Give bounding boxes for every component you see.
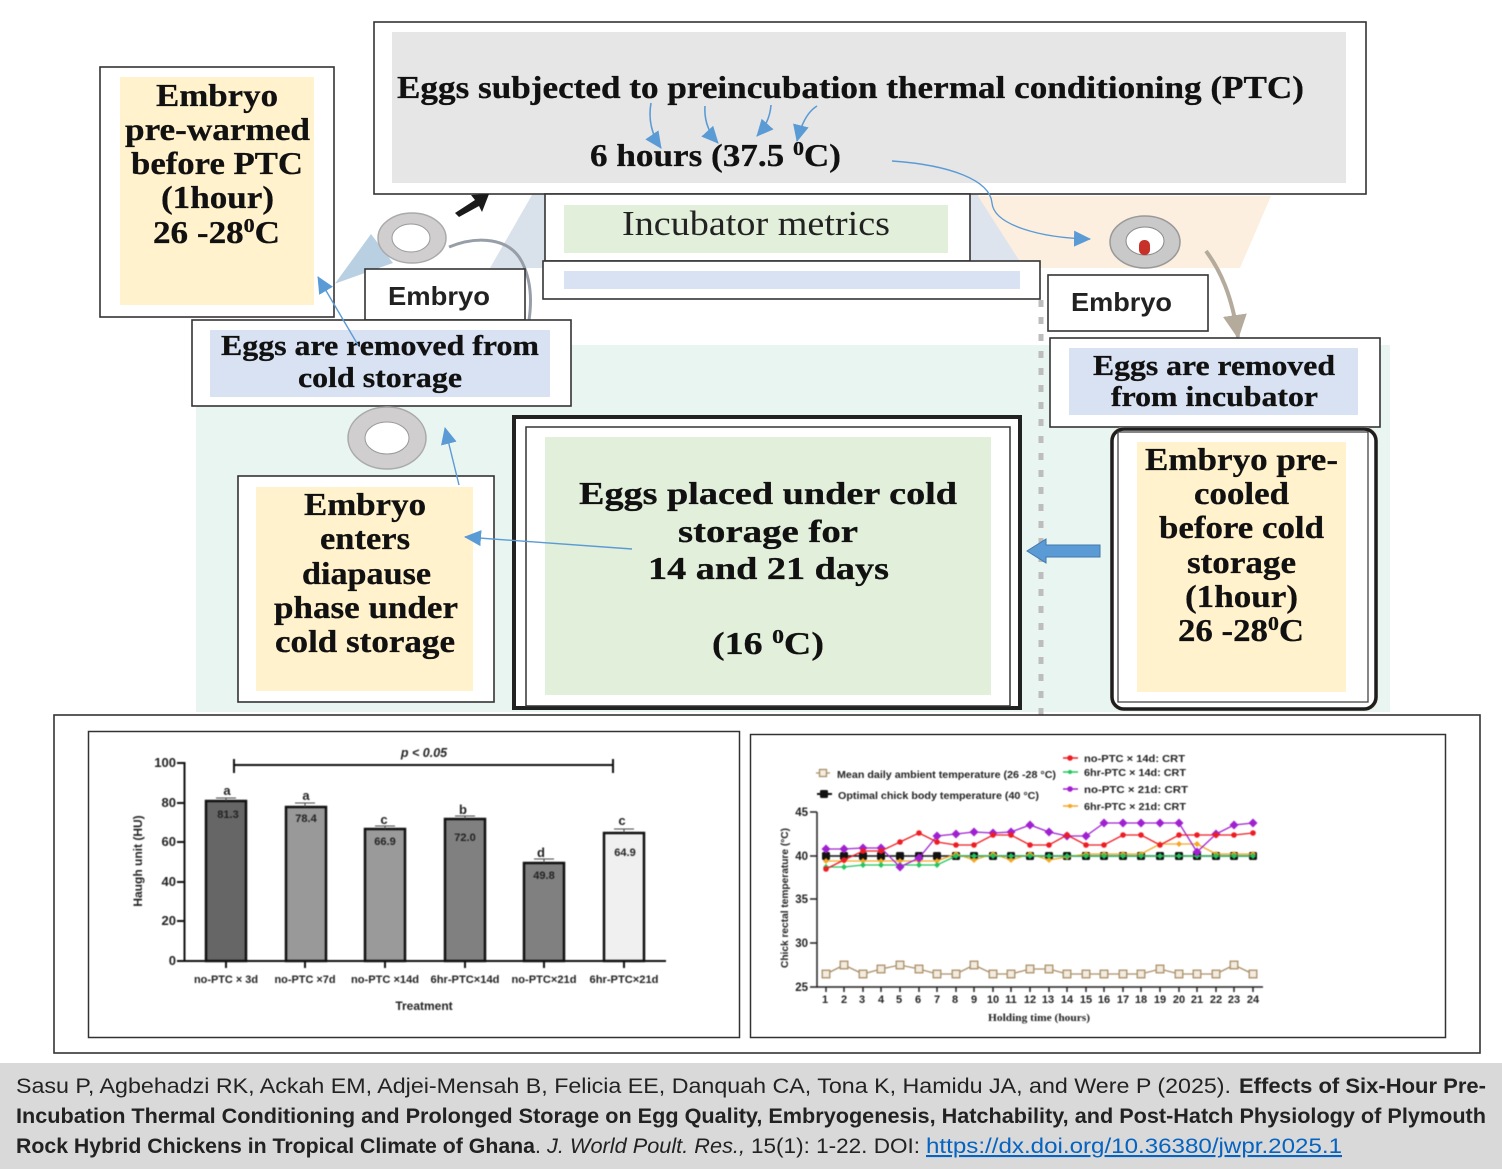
line chart: chick rectal temperature: 45	[795, 807, 809, 819]
panel: cold storage: 0	[772, 626, 784, 648]
citation band	[0, 1063, 1502, 1169]
legend	[816, 754, 1188, 813]
panel: preincubation thermal conditioning: C)	[804, 137, 841, 173]
bar chart: Haugh unit by treatment: d	[537, 845, 545, 860]
bar chart: Haugh unit by treatment: 78.4	[295, 813, 318, 825]
line chart: chick rectal temperature: 23	[1228, 994, 1240, 1006]
bar chart: Haugh unit by treatment: a	[223, 783, 231, 798]
line chart: chick rectal temperature: 22	[1210, 994, 1222, 1006]
bar chart: Haugh unit by treatment: no-PTC ×14d	[351, 974, 419, 986]
bar chart: Haugh unit by treatment: c	[380, 812, 388, 827]
arrow: PTC to embryo	[892, 161, 1090, 239]
panel: embryo pre-cooled	[1110, 427, 1378, 711]
panel: embryo pre-cooled: 0	[1268, 613, 1279, 635]
line chart: chick rectal temperature: 9	[971, 994, 977, 1006]
line chart: chick rectal temperature: 14	[1061, 994, 1074, 1006]
panel: incubator metrics	[545, 194, 970, 261]
line chart: chick rectal temperature: 6	[915, 994, 921, 1006]
panel: cold storage: Eggs placed under cold	[579, 475, 957, 511]
line chart: chick rectal temperature: 13	[1042, 994, 1054, 1006]
bar chart: Haugh unit by treatment: 60	[162, 834, 176, 849]
bar chart: Haugh unit by treatment: 72.0	[454, 832, 476, 844]
panel: embryo enters diapause: Embryo	[304, 486, 426, 522]
arrow: block arrow to cold storage	[1027, 539, 1100, 563]
panel: embryo enters diapause	[238, 476, 494, 702]
citation band: 15(1): 1-22. DOI:	[751, 1135, 920, 1158]
legend: Optimal chick body temperature (40 °C)	[838, 791, 1039, 802]
line chart: chick rectal temperature: 3	[859, 994, 865, 1006]
arrow: cold storage to diapause	[465, 537, 632, 549]
panel: embryo pre-cooled: C	[1279, 612, 1304, 648]
arrow: grey arc to embryo	[449, 240, 531, 320]
line chart: chick rectal temperature: Holding time (hours)	[988, 1013, 1091, 1024]
background wedge: incubator right	[970, 195, 1026, 262]
panel: embryo pre-cooled: 26 -28	[1178, 612, 1261, 648]
arrow: removed to pre-warmed	[318, 277, 358, 345]
panel: embryo enters diapause: diapause	[302, 555, 431, 591]
bar chart: Haugh unit by treatment: 6hr-PTC×21d	[590, 974, 658, 986]
arrow: black to PTC	[455, 194, 489, 217]
panel: embryo pre-warmed: Embryo	[156, 77, 278, 113]
bar chart: Haugh unit by treatment: p < 0.05	[400, 746, 448, 760]
citation band: J. World Poult. Res.,	[546, 1135, 745, 1158]
bar chart: Haugh unit by treatment: no-PTC × 3d	[194, 974, 258, 986]
panel: eggs removed from cold storage: cold storage	[298, 363, 462, 394]
background wedge: incubator left	[490, 195, 545, 268]
series: ambient temperature	[826, 965, 1253, 974]
icon: egg ring lower left	[348, 407, 426, 469]
panel: preincubation thermal conditioning: 6 hours (37.5	[590, 137, 767, 173]
panel: embryo pre-cooled: (1hour)	[1185, 578, 1298, 614]
line chart: chick rectal temperature: 35	[795, 894, 809, 906]
legend: Mean daily ambient temperature (26 -28 °C)	[837, 770, 1056, 781]
background wedge: left blue	[334, 234, 393, 285]
line chart: chick rectal temperature: 24	[1247, 994, 1260, 1006]
citation band: Effects of Six-Hour Pre-	[1239, 1075, 1486, 1098]
panel: cold storage: C)	[784, 625, 824, 661]
citation band: .	[535, 1135, 541, 1158]
label: embryo left: Embryo	[388, 281, 490, 311]
line chart: chick rectal temperature: 11	[1005, 994, 1017, 1006]
bar chart: Haugh unit by treatment: 81.3	[217, 809, 239, 821]
legend: 6hr-PTC × 21d: CRT	[1084, 802, 1186, 813]
bar chart: Haugh unit by treatment: no-PTC ×7d	[274, 974, 336, 986]
bar chart: Haugh unit by treatment: Treatment	[395, 999, 453, 1013]
bar chart: Haugh unit by treatment: 49.8	[533, 870, 555, 882]
line chart: chick rectal temperature: 25	[795, 982, 809, 994]
line chart: chick rectal temperature: 15	[1080, 994, 1092, 1006]
panel: embryo pre-warmed: 26 -28	[153, 214, 236, 250]
citation band: https://dx.doi.org/10.36380/jwpr.2025.1	[926, 1135, 1342, 1158]
label: embryo right	[1048, 275, 1208, 331]
panel: eggs removed from cold storage	[192, 320, 571, 406]
panel: eggs removed from incubator: Eggs are removed	[1093, 351, 1335, 382]
panel: embryo pre-warmed: 0	[244, 215, 255, 237]
panel: embryo pre-warmed: pre-warmed	[125, 111, 310, 147]
line chart: chick rectal temperature: 12	[1024, 994, 1036, 1006]
panel: preincubation thermal conditioning: 0	[793, 138, 804, 160]
icon: egg ring upper left	[378, 213, 446, 263]
line chart: chick rectal temperature: 30	[795, 938, 808, 950]
bar chart: Haugh unit by treatment: 6hr-PTC×14d	[430, 974, 500, 986]
panel: eggs removed from cold storage: Eggs are removed from	[221, 331, 539, 362]
line chart: chick rectal temperature: 17	[1117, 994, 1129, 1006]
icon: egg with embryo	[1110, 216, 1180, 268]
panel: cold storage: 14 and 21 days	[648, 550, 889, 586]
series: 6hr-PTC 21d	[826, 844, 1253, 861]
bar chart: Haugh unit by treatment: 80	[162, 795, 176, 810]
panel: embryo pre-cooled: before cold	[1159, 509, 1324, 545]
line chart: chick rectal temperature	[750, 734, 1446, 1038]
panel: embryo enters diapause: phase under	[274, 589, 458, 625]
dotted divider line	[1038, 300, 1044, 716]
line chart: chick rectal temperature: 19	[1154, 994, 1166, 1006]
citation band: Incubation Thermal Conditioning and Prolonged Storage on Egg Quality, Embryogenesis, Hatchability, and Post-Hatch Physiology of Plymouth	[16, 1105, 1486, 1128]
panel: embryo pre-cooled: Embryo pre-	[1145, 441, 1338, 477]
bar chart: Haugh unit by treatment: 0	[169, 953, 176, 968]
panel: results charts	[54, 715, 1480, 1053]
cold storage background panel	[196, 345, 1390, 712]
line chart: chick rectal temperature: 20	[1173, 994, 1185, 1006]
panel: embryo pre-warmed: C	[255, 214, 280, 250]
series: optimal chick temperature	[826, 855, 1253, 857]
arrow: diapause to removed	[445, 428, 459, 485]
line chart: chick rectal temperature: 40	[795, 851, 808, 863]
label: embryo left	[365, 269, 525, 320]
line chart: chick rectal temperature: 7	[934, 994, 940, 1006]
icon: heat arrows	[650, 103, 817, 148]
bar chart: Haugh unit by treatment: b	[459, 802, 467, 817]
panel: embryo enters diapause: cold storage	[275, 623, 455, 659]
bar chart: Haugh unit by treatment: 100	[154, 755, 176, 770]
line chart: chick rectal temperature: 16	[1098, 994, 1110, 1006]
line chart: chick rectal temperature: Chick rectal temperature (°C)	[779, 828, 791, 968]
panel: preincubation thermal conditioning	[374, 22, 1366, 194]
bar chart: Haugh unit by treatment: 66.9	[374, 836, 396, 848]
panel: eggs removed from incubator: from incubator	[1111, 382, 1318, 413]
arrow: embryo to incubator removal	[1206, 251, 1238, 337]
panel: cold storage: storage for	[678, 513, 858, 549]
panel: embryo pre-warmed: before PTC	[131, 145, 303, 181]
citation band: Sasu P, Agbehadzi RK, Ackah EM, Adjei-Mensah B, Felicia EE, Danquah CA, Tona K, Hamidu JA, and Were P (2025).	[16, 1075, 1231, 1098]
bar chart: Haugh unit by treatment	[88, 732, 740, 1038]
panel: incubator metrics: Incubator metrics	[622, 204, 890, 243]
bar chart: Haugh unit by treatment: 40	[162, 874, 176, 889]
panel: eggs removed from incubator	[1050, 338, 1380, 427]
panel: cold storage	[514, 417, 1020, 708]
label: embryo right: Embryo	[1071, 287, 1172, 317]
legend: no-PTC × 21d: CRT	[1084, 785, 1188, 796]
panel: incubator metrics lower bar	[543, 261, 1040, 299]
line chart: chick rectal temperature: 8	[952, 994, 958, 1006]
line chart: chick rectal temperature: 5	[896, 994, 902, 1006]
line chart: chick rectal temperature: 18	[1135, 994, 1147, 1006]
panel: cold storage: (16	[712, 625, 755, 661]
series: no-PTC 14d	[826, 833, 1253, 869]
panel: embryo pre-cooled: cooled	[1194, 475, 1289, 511]
bar chart: Haugh unit by treatment: c	[618, 813, 626, 828]
panel: embryo enters diapause: enters	[320, 520, 410, 556]
bar chart: Haugh unit by treatment: Haugh unit (HU)	[131, 815, 145, 907]
panel: preincubation thermal conditioning: Eggs subjected to preincubation thermal conditioning (PTC)	[397, 69, 1304, 105]
background wedge: peach trapezoid	[978, 196, 1271, 268]
bar chart: Haugh unit by treatment: 64.9	[614, 847, 636, 859]
legend: no-PTC × 14d: CRT	[1084, 754, 1185, 765]
line chart: chick rectal temperature: 21	[1191, 994, 1203, 1006]
citation band: Rock Hybrid Chickens in Tropical Climate of Ghana	[16, 1135, 535, 1158]
panel: embryo pre-warmed	[100, 67, 334, 317]
bar chart: Haugh unit by treatment: a	[302, 788, 310, 803]
panel: embryo pre-warmed: (1hour)	[161, 179, 274, 215]
series: 6hr-PTC 14d	[826, 856, 1253, 867]
line chart: chick rectal temperature: 10	[987, 994, 999, 1006]
panel: embryo pre-cooled: storage	[1187, 544, 1296, 580]
legend: 6hr-PTC × 14d: CRT	[1084, 768, 1186, 779]
bar chart: Haugh unit by treatment: 20	[162, 913, 176, 928]
bar chart: Haugh unit by treatment: no-PTC×21d	[512, 974, 576, 986]
line chart: chick rectal temperature: 2	[841, 994, 847, 1006]
line chart: chick rectal temperature: 1	[822, 994, 828, 1006]
series: no-PTC 21d	[826, 823, 1253, 867]
line chart: chick rectal temperature: 4	[878, 994, 885, 1006]
